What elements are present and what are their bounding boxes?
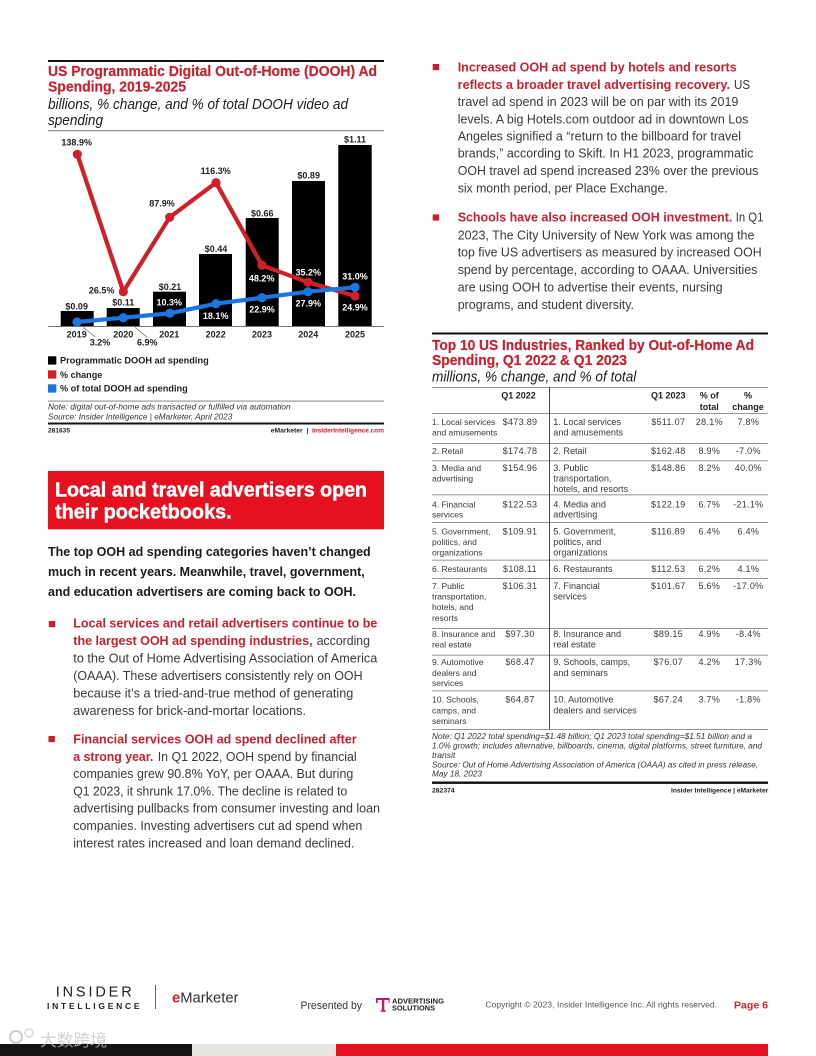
row 2: $174.78 xyxy=(503,446,537,456)
row 3: 3. Public xyxy=(553,463,589,473)
table header row: % xyxy=(744,390,752,400)
row 3: 40.0% xyxy=(735,463,762,473)
bar value labels: $0.09 xyxy=(65,302,88,312)
intro paragraph xyxy=(48,544,371,599)
chart credit line: eMarketer xyxy=(271,428,303,435)
bullet: hotels and resorts: US xyxy=(734,78,750,92)
row 2: 2. Retail xyxy=(553,446,587,456)
year axis labels: 2022 xyxy=(206,330,226,340)
table header row: % of xyxy=(700,390,720,400)
chart note and source: Source: Insider Intelligence | eMarketer, April 2023 xyxy=(48,411,233,421)
row 4: -21.1% xyxy=(733,500,763,510)
table title xyxy=(432,338,754,369)
row 5: 6.4% xyxy=(737,527,759,537)
row 9: dealers and xyxy=(432,668,477,678)
percent of total labels: 22.9% xyxy=(249,305,275,315)
row 5: 6.4% xyxy=(698,527,720,537)
row 10: -1.8% xyxy=(736,695,761,705)
row 1: $511.07 xyxy=(651,417,685,427)
row 7: 7. Public xyxy=(432,581,465,591)
bar value labels: $0.66 xyxy=(251,209,274,219)
row 8: real estate xyxy=(432,640,472,650)
intro paragraph: The top OOH ad spending categories haven’t changed xyxy=(48,544,371,559)
bullet: local services and retail xyxy=(49,617,377,718)
row 6: 6. Restaurants xyxy=(432,564,487,574)
row 7: transportation, xyxy=(432,591,486,601)
table credit line: 282374 xyxy=(432,787,455,794)
chart subtitle xyxy=(48,97,349,129)
row 9: $68.47 xyxy=(505,657,535,667)
bar value labels: $0.21 xyxy=(159,282,181,292)
bullet: local services and retail: (OAAA). These advertisers consistently rely on OOH xyxy=(73,669,363,683)
row 3: transportation, xyxy=(553,474,611,484)
line: percent of total DOOH ad spending xyxy=(72,283,360,327)
row 1: and amusements xyxy=(432,428,497,438)
table title: Top 10 US Industries, Ranked by Out-of-Home Ad xyxy=(432,338,754,354)
row 4: $122.19 xyxy=(651,500,686,510)
row 5: $109.91 xyxy=(503,527,537,537)
bullet: schools: spend by percentage, according to OAAA. Universities xyxy=(458,263,757,277)
row 6: 6. Restaurants xyxy=(553,564,613,574)
row 9: 4.2% xyxy=(698,657,720,667)
row 7: hotels, and xyxy=(432,602,474,612)
bullet: financial services: advertising pullbacks from consumer investing and loan xyxy=(73,802,380,816)
row 9: $76.07 xyxy=(654,657,683,667)
row 6: $112.53 xyxy=(651,564,685,574)
row 5: organizations xyxy=(553,548,608,558)
row 6 xyxy=(432,564,759,574)
row 7: $101.67 xyxy=(651,581,686,591)
row 4: $122.53 xyxy=(503,500,537,510)
row 7: resorts xyxy=(432,613,458,623)
bar chart: programmatic DOOH ad spending xyxy=(61,145,372,326)
row 2 xyxy=(432,446,761,456)
legend: % change xyxy=(60,370,102,380)
row 4 xyxy=(432,500,763,520)
panel: DOOH ad spending chart xyxy=(48,60,384,435)
bullet: local services and retail: awareness for brick-and-mortar locations. xyxy=(73,704,306,718)
bullet: hotels and resorts: Angeles signified a “return to the billboard for travel xyxy=(458,129,741,143)
row 1: $473.89 xyxy=(503,417,537,427)
row 10 xyxy=(432,695,761,726)
row 1: 1. Local services xyxy=(432,417,495,427)
bullet: hotels and resorts xyxy=(433,61,758,195)
bullet: hotels and resorts: six month period, per Place Exchange. xyxy=(458,181,668,195)
footer logo: Insider Intelligence xyxy=(47,985,156,1011)
row 1: 7.8% xyxy=(737,417,759,427)
footer logo: eMarketer: eMarketer xyxy=(172,990,239,1006)
percent change labels: 87.9% xyxy=(149,199,175,209)
bullet: schools: top five US advertisers as measured by increased OOH xyxy=(458,246,762,260)
table note and source: May 18, 2023 xyxy=(432,769,482,779)
row 5 xyxy=(432,527,759,558)
chart credit line: InsiderIntelligence.com xyxy=(312,428,384,435)
table credit line xyxy=(432,787,769,794)
table note and source: transit xyxy=(432,750,456,760)
row 1: and amusements xyxy=(553,428,624,438)
bullet: local services and retail: the largest OOH ad spending industries, xyxy=(73,634,313,648)
row 8: 4.9% xyxy=(698,629,720,639)
sponsor logo: T-Mobile Advertising Solutions xyxy=(376,996,444,1013)
row 3: $148.86 xyxy=(651,463,686,473)
row 9: services xyxy=(432,678,463,688)
presented by label: Presented by xyxy=(300,1000,362,1012)
bullet: hotels and resorts: OOH travel ad spend increased 23% over the previous xyxy=(458,164,758,178)
footer colour bar xyxy=(0,1044,768,1056)
watermark xyxy=(10,1029,107,1050)
percent of total labels: 6.9% xyxy=(137,338,158,348)
row 4: services xyxy=(432,510,463,520)
bullet: financial services: a strong year. xyxy=(73,750,153,764)
row 10: dealers and services xyxy=(553,705,637,715)
year axis labels xyxy=(67,330,365,340)
row 10: seminars xyxy=(432,716,466,726)
bullet: local services and retail: to the Out of Home Advertising Association of America xyxy=(73,652,377,666)
row 10: camps, and xyxy=(432,705,476,715)
bullet: hotels and resorts: reflects a broader travel advertising recovery. xyxy=(458,78,730,92)
intro paragraph: and education advertisers are coming back to OOH. xyxy=(48,584,356,599)
bullet: schools: In Q1 xyxy=(736,211,763,225)
section heading banner xyxy=(48,471,384,529)
row 9: 9. Schools, camps, xyxy=(553,657,630,667)
row 5: politics, and xyxy=(432,537,477,547)
table header row: Q1 2022 xyxy=(501,390,536,400)
legend: Programmatic DOOH ad spending xyxy=(60,356,209,366)
bar value labels: $0.89 xyxy=(297,171,320,181)
row 9 xyxy=(432,657,762,688)
chart subtitle: billions, % change, and % of total DOOH video ad xyxy=(48,97,349,113)
row 3: hotels, and resorts xyxy=(553,484,629,494)
row 3: 8.2% xyxy=(698,463,720,473)
row 8: 8. Insurance and xyxy=(432,629,496,639)
bullet: local services and retail: because it’s a tried-and-true method of generating xyxy=(73,687,353,701)
bullet: schools: are using OOH to advertise their events, nursing xyxy=(458,281,723,295)
bullet: financial services: interest rates increased and loan demand declined. xyxy=(73,837,354,851)
section heading banner: their pocketbooks. xyxy=(55,500,232,523)
bullet: financial services: companies grew 90.8% YoY, per OAAA. But during xyxy=(73,767,353,781)
row 10: $64.87 xyxy=(505,695,535,705)
row 5: 5. Government, xyxy=(553,527,616,537)
table credit line: Insider Intelligence | eMarketer xyxy=(671,787,769,794)
table grid lines xyxy=(432,387,768,730)
row 10: 10. Automotive xyxy=(553,695,613,705)
percent change labels: 48.2% xyxy=(249,274,274,284)
percent change labels: 24.9% xyxy=(342,303,368,313)
line: percent change xyxy=(73,150,360,301)
row 2: -7.0% xyxy=(736,446,761,456)
bullet: financial services: companies. Investing advertisers cut ad spend when xyxy=(73,819,362,833)
sponsor logo: T-Mobile Advertising Solutions: ADVERTISING xyxy=(392,996,444,1005)
bar value labels: $1.11 xyxy=(344,135,366,145)
percent change labels: 26.5% xyxy=(89,286,114,296)
chart title xyxy=(48,64,377,96)
year axis labels: 2024 xyxy=(298,330,318,340)
row 7: 5.6% xyxy=(698,581,720,591)
row 8: $89.15 xyxy=(654,629,683,639)
bullet: local services and retail: according xyxy=(317,634,370,648)
row 7: 7. Financial xyxy=(553,581,600,591)
table header row xyxy=(501,390,764,412)
table title: Spending, Q1 2022 & Q1 2023 xyxy=(432,353,627,369)
row 7: -17.0% xyxy=(733,581,763,591)
panel: top 10 industries table xyxy=(432,332,769,794)
row 3: $154.96 xyxy=(503,463,537,473)
row 7 xyxy=(432,581,763,623)
bullet: schools: programs, and student diversity. xyxy=(458,298,634,312)
row 6: 4.1% xyxy=(737,564,759,574)
row 10: 10. Schools, xyxy=(432,695,479,705)
percent of total labels: 27.9% xyxy=(296,298,321,308)
sponsor logo: T-Mobile Advertising Solutions: SOLUTIONS xyxy=(392,1004,435,1013)
row 6: 6.2% xyxy=(698,564,720,574)
row 2: 2. Retail xyxy=(432,446,463,456)
chart credit line: 281635 xyxy=(48,428,70,435)
chart title: US Programmatic Digital Out-of-Home (DOOH) Ad xyxy=(48,64,377,80)
row 2: 8.9% xyxy=(698,446,720,456)
page number: Page 6 xyxy=(734,1000,768,1012)
table note and source xyxy=(432,731,762,779)
watermark: 大数跨境 xyxy=(40,1031,107,1050)
percent of total labels: 18.1% xyxy=(203,311,228,321)
percent of total labels: 31.0% xyxy=(342,272,368,282)
bullet: schools: Schools have also increased OOH investment. xyxy=(458,211,732,225)
bullet: financial services: Q1 2023, it shrunk 17.0%. The decline is related to xyxy=(73,785,347,799)
percent of total labels xyxy=(83,272,368,348)
chart note and source: Note: digital out-of-home ads transacted or fulfilled via automation xyxy=(48,402,291,412)
footer logo: Insider Intelligence: INSIDER xyxy=(56,985,132,1001)
table header row: Q1 2023 xyxy=(651,390,686,400)
table subtitle: millions, % change, and % of total xyxy=(432,370,637,386)
row 2: $162.48 xyxy=(651,446,686,456)
bullet: local services and retail: Local services and retail advertisers continue to be xyxy=(73,617,377,631)
legend: % of total DOOH ad spending xyxy=(60,384,188,394)
percent change labels xyxy=(61,138,368,313)
table header row: change xyxy=(732,402,764,412)
row 8: real estate xyxy=(553,640,596,650)
bar value labels: $0.44 xyxy=(205,244,227,254)
section heading banner: Local and travel advertisers open xyxy=(55,479,367,502)
footer logo: Insider Intelligence: INTELLIGENCE xyxy=(47,1001,140,1011)
table note and source: 1.0% growth; includes alternative, billboards, cinema, digital platforms, street furniture, and xyxy=(432,741,762,751)
year axis labels: 2025 xyxy=(345,330,365,340)
year axis labels: 2020 xyxy=(113,330,133,340)
bullet: hotels and resorts: Increased OOH ad spend by hotels and resorts xyxy=(458,61,737,75)
year axis labels: 2019 xyxy=(67,330,87,340)
table header row: total xyxy=(700,402,719,412)
bullet: hotels and resorts: levels. A big Hotels.com outdoor ad in downtown Los xyxy=(458,112,748,126)
bullet: hotels and resorts: travel ad spend in 2023 will be on par with its 2019 xyxy=(458,95,738,109)
chart subtitle: spending xyxy=(48,113,103,129)
row 4: 6.7% xyxy=(698,500,720,510)
row 8: $97.30 xyxy=(505,629,535,639)
copyright: Copyright © 2023, Insider Intelligence Inc. All rights reserved. xyxy=(485,1001,717,1010)
bullet: financial services: Financial services OOH ad spend declined after xyxy=(73,732,357,746)
percent of total labels: 3.2% xyxy=(90,338,110,348)
row 5: organizations xyxy=(432,548,483,558)
row 3 xyxy=(432,463,762,494)
percent of total labels: 10.3% xyxy=(157,298,182,308)
row 8: 8. Insurance and xyxy=(553,629,621,639)
bullet: financial services xyxy=(48,732,380,851)
percent change labels: 116.3% xyxy=(201,166,231,176)
row 1: 1. Local services xyxy=(553,417,621,427)
row 8: -8.4% xyxy=(736,629,761,639)
bullet: hotels and resorts: brands,” according to Skift. In H1 2023, programmatic xyxy=(458,147,753,161)
row 7: $106.31 xyxy=(503,581,537,591)
row 8 xyxy=(432,629,761,650)
row 1: 28.1% xyxy=(696,417,723,427)
row 4: advertising xyxy=(553,510,597,520)
row 5: politics, and xyxy=(553,537,601,547)
row 10: 3.7% xyxy=(698,695,720,705)
bar value labels xyxy=(65,135,366,312)
row 9: 17.3% xyxy=(735,657,762,667)
chart credit line xyxy=(48,428,384,435)
row 9: and seminars xyxy=(553,668,608,678)
row 7: services xyxy=(553,591,587,601)
row 6: $108.11 xyxy=(503,564,537,574)
intro paragraph: much in recent years. Meanwhile, travel, government, xyxy=(48,564,365,579)
bar value labels: $0.11 xyxy=(112,298,134,308)
row 4: 4. Financial xyxy=(432,500,476,510)
bullet: financial services: In Q1 2022, OOH spend by financial xyxy=(158,750,357,764)
chart credit line: | xyxy=(307,428,309,435)
row 5: $116.89 xyxy=(651,527,685,537)
chart title: Spending, 2019-2025 xyxy=(48,80,186,96)
row 9: 9. Automotive xyxy=(432,657,484,667)
row 4: 4. Media and xyxy=(553,500,606,510)
percent change labels: 138.9% xyxy=(61,138,92,148)
year axis labels: 2021 xyxy=(159,330,179,340)
row 5: 5. Government, xyxy=(432,527,491,537)
chart note and source xyxy=(48,402,291,421)
table note and source: Source: Out of Home Advertising Association of America (OAAA) as cited in press release, xyxy=(432,759,758,769)
row 1 xyxy=(432,417,759,438)
row 3: 3. Media and xyxy=(432,463,481,473)
percent change labels: 35.2% xyxy=(296,268,321,278)
row 3: advertising xyxy=(432,474,473,484)
year axis labels: 2023 xyxy=(252,330,272,340)
row 10: $67.24 xyxy=(654,695,683,705)
legend xyxy=(48,356,209,394)
bullet: schools: 2023, The City University of New York was among the xyxy=(458,228,754,242)
table note and source: Note: Q1 2022 total spending=$1.48 billion; Q1 2023 total spending=$1.51 billion and a xyxy=(432,731,752,741)
bullet: schools xyxy=(433,211,763,312)
